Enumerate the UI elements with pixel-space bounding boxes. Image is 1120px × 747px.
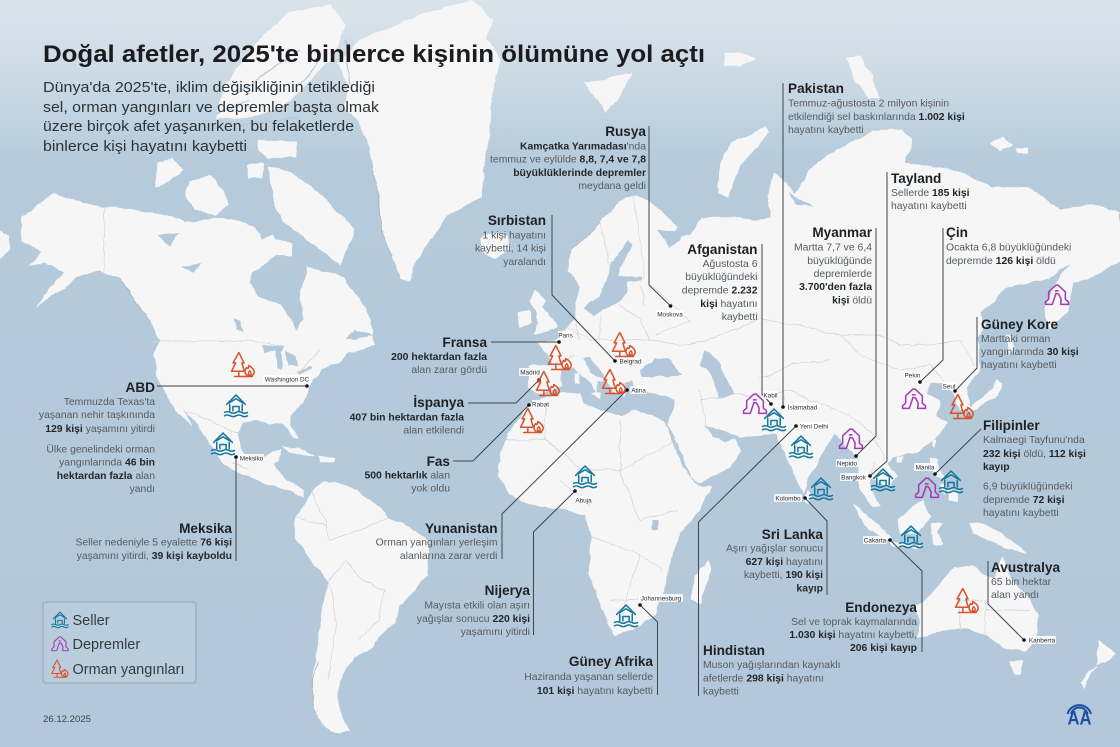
- text: depremde 126 kişi öldü: [946, 256, 1056, 267]
- city marker: Belgrad: [613, 357, 643, 365]
- text: kayıp: [983, 462, 1010, 473]
- city marker: Atina: Atina: [631, 387, 646, 394]
- text: hayatını kaybetti: [891, 201, 967, 212]
- callout: Sırbistan: [475, 213, 643, 365]
- leader line: [552, 215, 615, 361]
- text: [475, 230, 546, 268]
- text: yaşanan nehir taşkınında: [39, 410, 155, 421]
- text: yok oldu: [411, 484, 450, 494]
- text: depremlerde: [814, 269, 872, 280]
- city marker: İslamabad: İslamabad: [788, 402, 818, 411]
- legend item: Depremler: Depremler: [72, 637, 140, 653]
- text: büyüklüğündeki: [685, 272, 758, 283]
- heading: Yunanistan: [425, 521, 498, 536]
- callout: Endonezya: [789, 536, 922, 654]
- text: Ocakta 6,8 büyüklüğündeki: [946, 242, 1071, 254]
- leader line: [502, 390, 627, 559]
- text: Temmuz-ağustosta 2 milyon kişinin: [788, 98, 949, 110]
- icons: floods: [212, 395, 962, 627]
- text: 6,9 büyüklüğündeki: [983, 482, 1073, 492]
- text: [788, 98, 965, 136]
- heading: Sırbistan: [488, 213, 546, 228]
- text: [794, 242, 872, 306]
- leader line: [856, 228, 876, 456]
- icons: forest fires: [232, 332, 978, 612]
- text: yangınlarında 30 kişi: [981, 347, 1079, 358]
- text: hayatını kaybetti: [981, 360, 1057, 371]
- heading: Pakistan: [788, 81, 844, 96]
- text: [350, 412, 464, 436]
- country borders: [104, 195, 1030, 680]
- city marker: Meksiko: Meksiko: [240, 455, 264, 462]
- landmass: Eurasia: [528, 130, 1120, 507]
- text: alan yandı: [991, 590, 1039, 601]
- landmass: Central American islands: [282, 446, 334, 462]
- text: yaşamını yitirdi: [461, 627, 530, 638]
- callout: Sri Lanka: [726, 494, 827, 595]
- legend: [43, 602, 196, 683]
- city marker: Washington DC: [263, 375, 311, 388]
- heading: Myanmar: [812, 225, 873, 240]
- leader line: [640, 605, 658, 695]
- text: alanlarına zarar verdi: [400, 551, 498, 562]
- callout: Fransa: [391, 331, 573, 376]
- landmass: Greenland: [339, 0, 500, 280]
- text: Ağustosta 6: [703, 259, 758, 270]
- text: 65 bin hektar: [991, 577, 1052, 588]
- city marker: Madrid: [519, 368, 541, 382]
- text: Muson yağışlarından kaynaklı: [703, 660, 840, 671]
- text: temmuz ve eylülde 8,8, 7,4 ve 7,8: [490, 155, 646, 166]
- callout: Fas: [364, 400, 549, 494]
- city marker: Bangkok: Bangkok: [841, 474, 867, 481]
- text: Mayısta etkili olan aşırı: [424, 600, 530, 612]
- city marker: Washington DC: Washington DC: [265, 376, 310, 383]
- city marker: Kabil: [763, 391, 778, 406]
- landmass: North America: [21, 193, 372, 497]
- text: [789, 617, 917, 654]
- title: Doğal afetler, 2025'te binlerce kişinin ölümüne yol açtı: [43, 41, 705, 68]
- text: kayıp: [796, 584, 823, 594]
- city marker: Kabil: Kabil: [763, 392, 778, 399]
- heading: Nijerya: [485, 583, 530, 598]
- text: Kamçatka Yarımadası'nda: [520, 142, 646, 152]
- intro text: [43, 79, 380, 155]
- heading: Meksika: [179, 521, 232, 536]
- inland seas: [157, 192, 813, 530]
- text: [376, 538, 498, 562]
- text: [417, 600, 530, 638]
- city marker: Kolombo: Kolombo: [775, 495, 801, 502]
- text: [891, 188, 970, 212]
- city marker: Kanberra: Kanberra: [1029, 637, 1056, 644]
- leader line: [157, 385, 307, 387]
- text: [524, 672, 653, 697]
- city marker: Nepido: [836, 454, 858, 467]
- text: 1.030 kişi hayatını kaybetti,: [789, 630, 917, 641]
- heading: Fransa: [442, 335, 487, 350]
- text: kaybetti: [722, 312, 758, 323]
- heading: Güney Kore: [981, 317, 1058, 332]
- callout: Afganistan: [682, 242, 778, 406]
- channels through arctic islands: [215, 40, 350, 125]
- leader line: [762, 244, 771, 404]
- heading: Avustralya: [991, 560, 1060, 575]
- callout: Filipinler: [914, 418, 1086, 519]
- text: etkilendiği sel baskınlarında 1.002 kişi: [788, 112, 965, 123]
- text: alan etkilendi: [403, 426, 464, 436]
- text: 407 bin hektardan fazla: [350, 412, 464, 424]
- leader line: [805, 498, 827, 595]
- leader line: [988, 561, 1024, 640]
- city marker: Paris: Paris: [558, 332, 573, 339]
- callout: Nijerya: [417, 489, 592, 638]
- city marker: Cakarta: Cakarta: [864, 537, 887, 544]
- text: Martta 7,7 ve 6,4: [794, 242, 872, 254]
- logo: AA: AA: [1068, 708, 1092, 730]
- city marker: Atina: [625, 386, 647, 394]
- leader line: [534, 491, 575, 635]
- callout: Güney Kore: [942, 317, 1079, 393]
- city marker: Rabat: [527, 400, 549, 408]
- text: [981, 334, 1079, 371]
- text: yağışlar sonucu 220 kişi: [417, 614, 530, 625]
- intro text: binlerce kişi hayatını kaybetti: [43, 138, 247, 155]
- heading: Tayland: [891, 171, 941, 186]
- heading: Çin: [946, 225, 968, 240]
- text: 129 kişi yaşamını yitirdi: [45, 424, 155, 435]
- leader line: [935, 429, 981, 474]
- text: alan zarar gördü: [411, 365, 487, 376]
- city marker: Abuja: [573, 489, 592, 504]
- city marker: Manila: [914, 463, 937, 476]
- text: [983, 435, 1086, 519]
- callout: ABD: [39, 375, 311, 495]
- text: [991, 577, 1052, 601]
- city marker: Paris: [557, 331, 573, 344]
- city marker: Johannesburg: [638, 594, 683, 607]
- city marker: Belgrad: Belgrad: [619, 358, 642, 365]
- text: [946, 242, 1071, 267]
- text: Temmuzda Texas'ta: [64, 397, 155, 408]
- city marker: Moskova: Moskova: [657, 312, 683, 318]
- leader line: [955, 317, 977, 391]
- city marker: Yeni Delhi: Yeni Delhi: [800, 423, 828, 430]
- heading: Afganistan: [687, 242, 758, 257]
- heading: ABD: [126, 380, 155, 395]
- text: Marttaki orman: [981, 334, 1051, 345]
- city marker: Rabat: Rabat: [532, 401, 549, 408]
- leader line: [782, 83, 784, 407]
- callout: Rusya: [490, 124, 684, 318]
- text: 500 hektarlık alan: [364, 470, 450, 482]
- icons: earthquakes: [744, 285, 1068, 497]
- text: Aşırı yağışlar sonucu: [726, 544, 823, 554]
- leader line: [698, 426, 796, 696]
- text: büyüklüğünde: [807, 256, 872, 267]
- text: 1 kişi hayatını: [482, 230, 546, 242]
- text: 206 kişi kayıp: [850, 643, 917, 654]
- text: yangınlarında 46 bin: [59, 458, 155, 468]
- text: [703, 660, 840, 698]
- text: [490, 142, 646, 192]
- city marker: Pekin: [904, 371, 922, 384]
- text: 627 kişi hayatını: [746, 557, 823, 568]
- text: depremde 2.232: [682, 286, 758, 296]
- text: [39, 397, 155, 495]
- city marker: İslamabad: [781, 402, 819, 411]
- heading: Fas: [427, 454, 450, 469]
- text: 232 kişi öldü, 112 kişi: [983, 449, 1086, 460]
- text: kaybetti, 190 kişi: [744, 570, 823, 581]
- leader line: [468, 380, 539, 403]
- city marker: Abuja: Abuja: [575, 497, 592, 504]
- leader line: [235, 457, 237, 561]
- city marker: Bangkok: [840, 473, 872, 481]
- legend item: Seller: Seller: [72, 613, 110, 629]
- legend item: Orman yangınları: Orman yangınları: [72, 662, 184, 678]
- heading: Filipinler: [983, 418, 1040, 433]
- text: 3.700'den fazla: [799, 282, 872, 293]
- text: kaybetti: [703, 686, 739, 698]
- text: Haziranda yaşanan sellerde: [524, 672, 653, 683]
- leader line: [920, 228, 943, 382]
- city marker: Moskova: [656, 304, 684, 318]
- text: Sellerde 185 kişi: [891, 188, 970, 199]
- text: büyüklüklerinde depremler: [513, 168, 646, 179]
- text: kaybetti, 14 kişi: [475, 244, 546, 254]
- text: 200 hektardan fazla: [391, 352, 487, 363]
- callout: Avustralya: [988, 560, 1060, 644]
- callout: İspanya: [350, 368, 541, 436]
- city marker: Madrid: Madrid: [520, 369, 540, 376]
- text: kişi hayatını: [700, 299, 758, 310]
- text: afetlerde 298 kişi hayatını: [703, 674, 824, 684]
- city marker: Seul: Seul: [943, 383, 955, 390]
- legend item: Seller: [52, 612, 110, 629]
- callout: Pakistan: [781, 81, 965, 411]
- landmass: South America: [295, 482, 429, 732]
- text: [364, 470, 450, 494]
- intro text: Dünya'da 2025'te, iklim değişikliğinin tetiklediği: [43, 79, 375, 96]
- intro text: üzere birçok afet yaşanırken, bu felaketlerde: [43, 118, 354, 135]
- landmass: Arctic Canada: [155, 5, 375, 350]
- darker coast details: [122, 170, 600, 707]
- callout: Myanmar: [794, 225, 876, 467]
- text: yandı: [130, 484, 155, 495]
- leader line: [491, 341, 559, 343]
- city marker: Manila: Manila: [916, 464, 935, 471]
- text: Seller nedeniyle 5 eyalette 76 kişi: [75, 538, 232, 548]
- text: kişi öldü: [832, 296, 872, 306]
- text: hektardan fazla alan: [57, 471, 155, 482]
- text: [391, 352, 487, 376]
- landmass: Africa: [498, 393, 712, 637]
- city marker: Nepido: Nepido: [837, 460, 858, 467]
- text: yaşamını yitirdi, 39 kişi kayboldu: [77, 551, 232, 562]
- callout: Güney Afrika: [524, 594, 683, 697]
- intro text: sel, orman yangınları ve depremler başta olmak: [43, 99, 380, 116]
- heading: Hindistan: [703, 643, 765, 658]
- text: [726, 544, 823, 594]
- callout: Hindistan: [698, 422, 840, 698]
- leader line: [649, 126, 670, 306]
- city marker: Meksiko: [234, 454, 264, 462]
- leader line: [870, 172, 887, 476]
- heading: Endonezya: [845, 600, 917, 615]
- leader line: [890, 540, 922, 652]
- text: Orman yangınları yerleşim: [376, 538, 498, 548]
- callout: Meksika: [75, 454, 264, 562]
- text: yaralandı: [503, 257, 546, 268]
- text: [75, 538, 232, 562]
- text: hayatını kaybetti: [788, 125, 864, 136]
- text: Ülke genelindeki orman: [46, 444, 155, 456]
- text: [682, 259, 758, 323]
- heading: İspanya: [413, 395, 464, 410]
- text: Kalmaegi Tayfunu'nda: [983, 435, 1085, 446]
- city marker: Pekin: Pekin: [904, 372, 921, 379]
- leader line: [453, 405, 529, 461]
- date: 26.12.2025: [43, 714, 91, 725]
- heading: Rusya: [605, 124, 646, 139]
- city marker: Johannesburg: Johannesburg: [641, 595, 682, 602]
- text: meydana geldi: [578, 181, 646, 192]
- text: 101 kişi hayatını kaybetti: [537, 686, 653, 697]
- text: hayatını kaybetti: [983, 508, 1059, 519]
- callout: Tayland: [840, 171, 970, 481]
- heading: Güney Afrika: [569, 654, 653, 669]
- city marker: Yeni Delhi: [794, 422, 829, 430]
- callout: Yunanistan: [376, 386, 647, 562]
- heading: Sri Lanka: [762, 527, 823, 542]
- callout: Çin: [904, 225, 1071, 384]
- text: Sel ve toprak kaymalarında: [791, 617, 917, 628]
- text: depremde 72 kişi: [983, 495, 1065, 506]
